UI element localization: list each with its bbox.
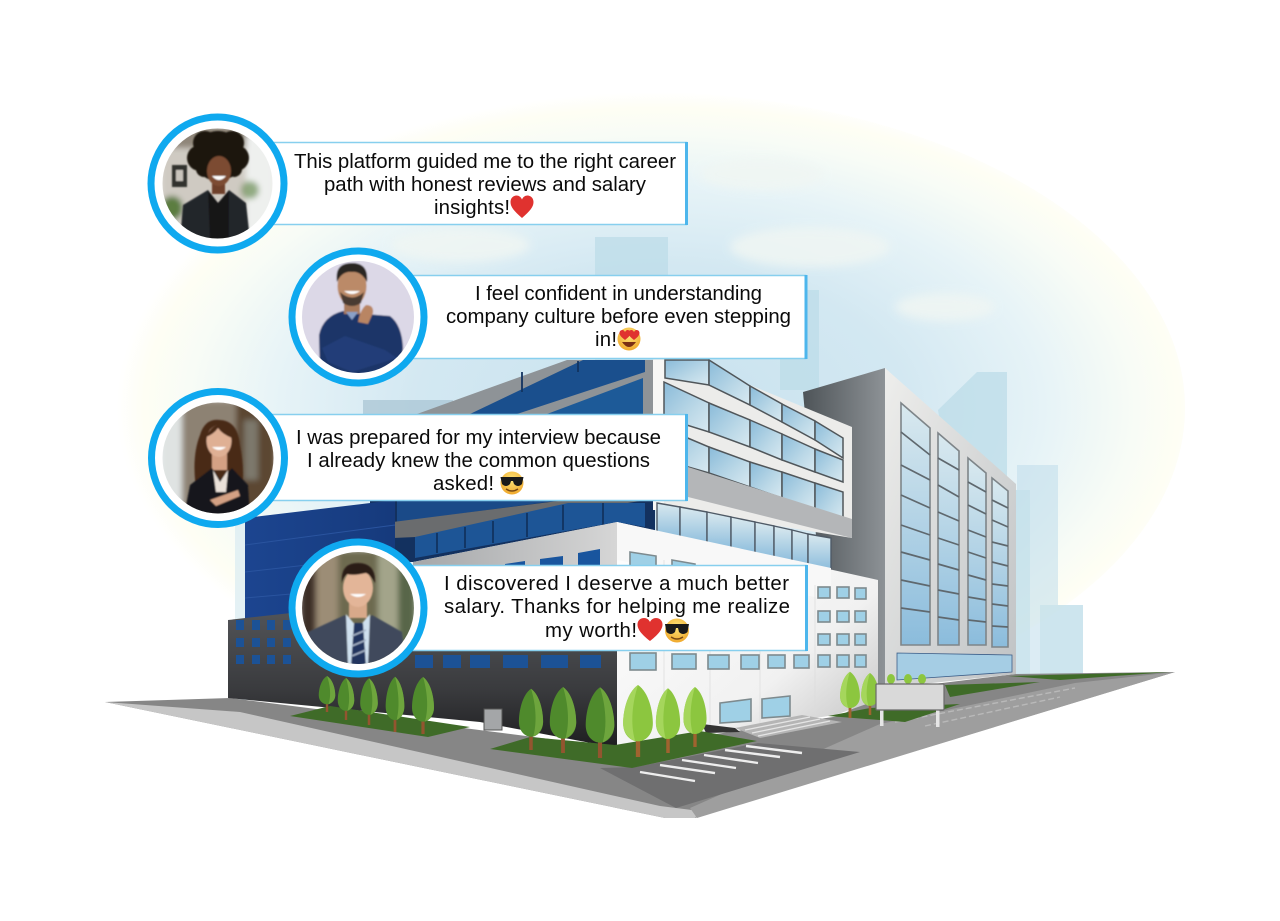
avatar ring (151, 117, 284, 250)
avatar ring (292, 542, 424, 674)
quote text (444, 573, 790, 642)
portrait: woman with afro hair (160, 126, 275, 241)
ground plaza (105, 672, 1175, 818)
quote text: I feel confident in understanding (475, 283, 762, 305)
sign board (876, 674, 944, 727)
quote text: I was prepared for my interview because (296, 427, 661, 449)
lower glass row (657, 503, 831, 570)
icon: sunglasses emoji (665, 618, 689, 642)
lawns (290, 672, 1170, 768)
upper window rows (664, 360, 843, 520)
white block windows (630, 552, 866, 723)
lower dark block windows (236, 620, 601, 668)
blue wall (245, 500, 395, 622)
service door (484, 709, 502, 730)
right tower (803, 368, 1016, 690)
upper block white frame (653, 345, 852, 538)
parking lines (640, 746, 802, 781)
quote text: insights! (434, 197, 510, 219)
speech card (270, 414, 688, 501)
portrait: man in grey suit and tie (300, 550, 416, 666)
quote text: in! (595, 329, 617, 351)
front kerb (105, 702, 700, 818)
avatar ring (292, 251, 424, 383)
quote text: company culture before even stepping (446, 306, 791, 328)
quote text: my worth! (545, 620, 637, 642)
road right (690, 672, 1175, 818)
tower entrance (897, 653, 1012, 680)
portrait: woman in black blazer (160, 400, 276, 516)
testimonial 4 (292, 542, 808, 674)
speech card (410, 275, 808, 359)
entrance stairs (702, 715, 842, 738)
icon: heart eyes emoji (618, 328, 640, 350)
portrait: man in navy sweater (300, 260, 416, 376)
upper block mid (370, 501, 655, 562)
parking area (600, 743, 860, 808)
building: office complex (228, 345, 1016, 748)
speech card (410, 565, 808, 651)
quote text: asked! (433, 473, 494, 495)
avatar ring (152, 392, 284, 524)
quote text: path with honest reviews and salary (324, 174, 647, 196)
trees (319, 672, 879, 758)
speech card (270, 142, 688, 225)
grey underside (688, 467, 852, 538)
quote text: salary. Thanks for helping me realize (444, 596, 790, 618)
testimonial 1 (151, 117, 688, 250)
quote text (294, 151, 676, 219)
testimonial 2 (292, 251, 808, 383)
sky glow background (95, 92, 1185, 724)
clouds (390, 158, 995, 321)
quote text (446, 283, 791, 351)
icon: heart emoji (638, 618, 662, 641)
road markings (895, 688, 1075, 726)
icon: sunglasses emoji (500, 472, 524, 494)
quote text: This platform guided me to the right career (294, 151, 676, 173)
distant skyline (235, 237, 1083, 700)
infographic: testimonials over office building (105, 104, 1185, 818)
quote text: I discovered I deserve a much better (444, 573, 789, 595)
upper block left (417, 360, 655, 414)
icon: heart emoji (510, 196, 534, 218)
lower dark block (228, 600, 617, 748)
quote text: I already knew the common questions (307, 450, 650, 472)
testimonial 3 (152, 392, 688, 524)
lower white block (413, 522, 617, 567)
quote text (296, 427, 661, 495)
